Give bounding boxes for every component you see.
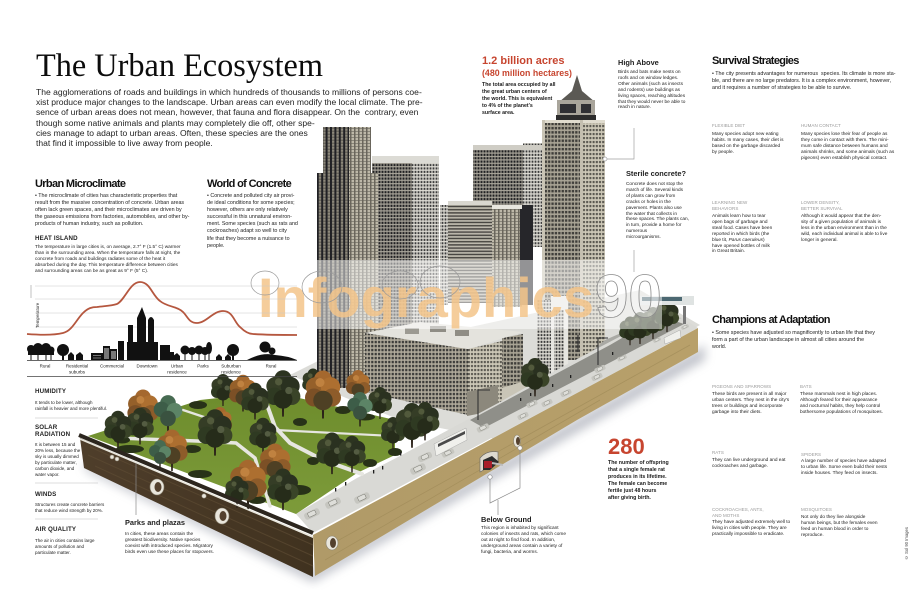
chart x labels: Downtown <box>136 364 158 368</box>
text: winds <box>35 502 104 513</box>
text: spiders: A large number of species have adapted <box>801 459 886 464</box>
heading: high above: High Above <box>618 58 659 67</box>
text: cockroaches, ants and moths: They have adjusted extremely well to <box>712 520 790 525</box>
line: high above leader <box>603 128 634 272</box>
heading: air quality: AIR QUALITY <box>35 526 76 533</box>
text: 280 offspring: The number of offspring <box>608 460 669 466</box>
text: cockroaches, ants and moths: practically impossible to eradicate. <box>712 532 784 537</box>
text: world of concrete: ment. Some species (such as rats and <box>207 221 298 227</box>
text: mosquitoes: feed on human blood in order to <box>801 527 868 532</box>
dark wall of block <box>80 438 313 577</box>
text: below ground: underground areas contain a variety of <box>481 544 562 549</box>
park trees <box>104 300 679 510</box>
label: lower density: LOWER DENSITY, <box>801 200 840 205</box>
temperature curve <box>27 282 297 335</box>
chart x labels: residence <box>167 370 187 374</box>
text: pigeons and sparrows: These birds are present in all major <box>712 392 786 397</box>
building: rear right block <box>473 143 543 247</box>
text: lower density: sity of a given population of animals is <box>801 220 881 225</box>
text: world of concrete: however, others are only relatively <box>207 207 288 213</box>
building: main tower with crown <box>542 75 605 360</box>
chart x labels <box>40 364 276 374</box>
text: lower density: Although it would appear that the den- <box>801 214 881 219</box>
text: human contact: mum safe distance between humans and <box>801 144 888 149</box>
text: high above: Other animals (such as insects <box>618 82 683 87</box>
label: pigeons and sparrows: PIGEONS AND SPARROWS <box>712 384 771 389</box>
intro text: that find it impossible to live away from people. <box>36 138 213 148</box>
text: below ground: This region is inhabited by significant <box>481 526 559 531</box>
label: cockroaches, ants and moths: COCKROACHES, ANTS, <box>712 507 764 512</box>
text: bats: Although feared for their appearance <box>800 398 877 403</box>
text: 280 offspring: The female can become <box>608 481 667 487</box>
cars and buses on the road <box>303 324 689 521</box>
title: The Urban Ecosystem <box>36 47 323 83</box>
text: human contact: Many species lose their fear of people as <box>801 132 887 137</box>
pedestrians <box>335 352 613 492</box>
label: cockroaches, ants and moths <box>712 507 764 518</box>
text: sterile concrete: microorganisms. <box>626 235 661 240</box>
text: bats: These mammals nest in high places. <box>800 392 877 397</box>
text: urban microclimate <box>35 193 190 227</box>
text: urban microclimate: products of human industry, such as pollution. <box>35 221 143 227</box>
text: parks and plazas: coexist with introduced species. Migratory <box>125 544 213 549</box>
text: survival strategies: • The city presents advantages for numerous species. Its climate is more sta- <box>712 71 896 77</box>
text: bats: bothersome populations of mosquitoes. <box>800 410 883 415</box>
text: heat island: absorbed during the day. This temperature difference between cities <box>35 263 178 268</box>
text: champions at adaptation: form a part of the urban landscape in almost all cities around the <box>712 337 864 343</box>
text: solar radiation: water vapor. <box>35 472 60 477</box>
text: high above: living spaces, reaching altitudes <box>618 94 685 99</box>
tan wall of block <box>313 328 698 576</box>
text: world of concrete: life that they become a nuisance to <box>207 236 290 242</box>
text: below ground: out at night to find food. In addition, <box>481 538 555 543</box>
text: lower density: wild, each individual animal is able to live <box>801 232 887 237</box>
text: sterile concrete: the water that collects in <box>626 212 677 217</box>
text: flexible diet: habits. In many cases, their diet is <box>712 138 784 143</box>
text: sterile concrete: numerous <box>626 229 647 234</box>
chart x labels: Commercial <box>100 364 124 368</box>
heading: heat island: HEAT ISLAND <box>35 235 78 242</box>
text: urban area stat <box>482 82 556 116</box>
chart x labels: residence <box>221 370 241 374</box>
text: champions at adaptation <box>712 330 875 350</box>
text: cockroaches, ants and moths: living in cities with people. They are <box>712 526 787 531</box>
text: solar radiation: sky is usually dimmed <box>35 454 79 459</box>
heading: solar radiation: SOLAR <box>35 424 57 431</box>
street lights <box>478 335 608 420</box>
intro text: The agglomerations of roads and buildings in which hundreds of thousands to millions of persons coe- <box>36 87 422 97</box>
top surface of the block: pavement <box>296 318 698 533</box>
text: high above: Birds and bats make nests on <box>618 70 681 75</box>
text: learning new behaviors: steal food. Cases have been <box>712 226 772 231</box>
text: rats <box>712 458 786 469</box>
text: air quality: particulate matter. <box>35 550 71 555</box>
text: pigeons and sparrows <box>712 392 789 415</box>
text: flexible diet: by people. <box>712 150 734 155</box>
chart x labels: Rural <box>266 364 276 368</box>
text: learning new behaviors: in Great Britain. <box>712 249 745 254</box>
text: pigeons and sparrows: garbage into their diets. <box>712 410 762 415</box>
text: humidity <box>35 400 107 411</box>
skyline silhouette <box>27 307 297 360</box>
text: rats: cockroaches and garbage. <box>712 464 768 469</box>
text: survival strategies: ble, and there are no large predators. It is a complex environment, however, <box>712 78 891 84</box>
text: world of concrete: • Concrete and polluted city air provi- <box>207 193 294 199</box>
heading: parks and plazas: Parks and plazas <box>125 518 185 527</box>
heading: humidity: HUMIDITY <box>35 388 66 395</box>
text: lower density: longer in general. <box>801 238 838 243</box>
text: high above: roofs and on window ledges. <box>618 76 678 81</box>
park lawn <box>88 392 395 514</box>
text: parks and plazas: In cities, these areas contain the <box>125 532 193 537</box>
text: mosquitoes: reproduce. <box>801 533 824 538</box>
text: sterile concrete: pavement. Plants also use <box>626 206 682 211</box>
text: parks and plazas <box>125 532 214 555</box>
text: world of concrete <box>207 193 298 249</box>
text: air quality: The air in cities contains large <box>35 538 95 543</box>
text: solar radiation: carbon dioxide, and <box>35 466 74 471</box>
text: winds: that reduce wind strength by 20%. <box>35 508 103 513</box>
text: urban microclimate: the gaseous emissions from factories, automobiles, and other by- <box>35 214 189 220</box>
text: below ground: colonies of insects and rats, which come <box>481 532 566 537</box>
text: urban area stat: the world. This is equivalent <box>482 96 552 102</box>
text: heat island: than in the surrounding area. When the temperature falls at night, the <box>35 251 180 256</box>
heading: solar radiation <box>35 424 70 438</box>
tunnel with red pipe <box>480 452 503 472</box>
text: 280 offspring <box>608 460 669 501</box>
text: learning new behaviors <box>712 214 772 254</box>
text: solar radiation: by particulate matter, <box>35 460 77 465</box>
text: air quality: amounts of pollution and <box>35 544 84 549</box>
text: humidity: It tends to be lower, although <box>35 400 93 405</box>
text: cockroaches, ants and moths <box>712 520 790 537</box>
stat: 280: 280 <box>608 434 645 459</box>
text: sterile concrete <box>626 182 689 240</box>
heading: survival strategies: Survival Strategies <box>712 55 799 67</box>
chart x labels: Urban <box>171 364 184 368</box>
curb and pipes on the block edge <box>79 435 520 550</box>
chart x labels: Residential <box>66 364 88 368</box>
heading: champions at adaptation: Champions at Adaptation <box>712 314 830 326</box>
text: mosquitoes: Not only do they live alongside <box>801 515 865 520</box>
label: bats: BATS <box>800 384 812 389</box>
intro text: cies manage to adapt to urban areas. Often, these species are the ones <box>36 128 308 138</box>
building: white slab by the road <box>537 296 568 378</box>
text: flexible diet: based on the garbage discarded <box>712 144 780 149</box>
text: spiders <box>801 458 887 476</box>
watermark band <box>300 260 662 329</box>
line: parks leader <box>135 463 137 515</box>
text: world of concrete: cockroaches) adapt so well to city <box>207 228 287 234</box>
heading: below ground: Below Ground <box>481 515 532 524</box>
stat: 1.2 billion acres: 1.2 billion acres <box>482 55 565 67</box>
text: urban microclimate: often lack green spaces, and their microclimates are driven by <box>35 207 182 213</box>
text: urban area stat: to 4% of the planet's <box>482 103 533 109</box>
text: bats <box>800 392 883 415</box>
text: world of concrete: people. <box>207 243 225 249</box>
text: mosquitoes <box>801 514 878 538</box>
park paths <box>118 402 393 506</box>
monorail on pillars <box>640 296 694 324</box>
text: high above: that they would never be able to <box>618 100 685 105</box>
watermark text: Infographics <box>258 266 594 329</box>
heat island chart <box>27 282 297 376</box>
text: spiders: to urban life. Some even build their nests <box>801 465 887 470</box>
text: urban microclimate: result from the massive concentration of concrete. Urban areas <box>35 200 184 206</box>
ground shadow <box>85 345 705 582</box>
text: sterile concrete: Concrete does not stop the <box>626 182 683 187</box>
label: learning new behaviors: BEHAVIORS <box>712 206 738 211</box>
heading: sterile concrete: Sterile concrete? <box>626 169 686 178</box>
text: survival strategies: and it requires a number of strategies to be able to survive. <box>712 85 851 91</box>
park shrubs <box>114 401 402 504</box>
text: flexible diet: Many species adopt new eating <box>712 132 779 137</box>
text: flexible diet <box>712 132 784 155</box>
intro text <box>36 87 423 148</box>
label: rats: RATS <box>712 450 724 455</box>
text: air quality <box>35 538 95 555</box>
text: lower density: less in the urban environment than in the <box>801 226 887 231</box>
text: humidity: rainfall is heavier and more plentiful. <box>35 406 107 411</box>
intro text: xist produce major changes to the landscape. Urban areas can even modify the local climate. The pre- <box>36 97 423 107</box>
street surface behind the buildings <box>290 290 700 440</box>
heading: urban microclimate: Urban Microclimate <box>35 178 125 190</box>
plaza in front of the tower <box>568 316 682 372</box>
text: human contact: pigeons) even establish physical contact. <box>801 156 887 161</box>
text: spiders: inside houses. They feed on insects. <box>801 471 878 476</box>
road <box>470 316 684 428</box>
heading: solar radiation: RADIATION <box>35 431 70 438</box>
text: human contact: animals shrinks, and some animals (such as <box>801 150 894 155</box>
heading: winds: WINDS <box>35 491 56 498</box>
text: sterile concrete: these spaces. The plants can, <box>626 217 689 222</box>
building: middle block <box>440 201 533 307</box>
text: lower density <box>801 214 888 243</box>
line: below ground leader <box>488 446 522 515</box>
text: learning new behaviors: have opened bottles of milk <box>712 244 770 249</box>
text: high above: and rodents) use buildings as <box>618 88 680 93</box>
text: parks and plazas: greatest biodiversity. Native species <box>125 538 200 543</box>
text: below ground: fungi, bacteria, and worms. <box>481 550 538 555</box>
chart x labels: suburbs <box>69 370 86 374</box>
text: 280 offspring: that a single female rat <box>608 467 665 473</box>
text: human contact <box>801 132 894 161</box>
text: sterile concrete: of plants can grow from <box>626 194 675 199</box>
text: sterile concrete: in turn, provide a home for <box>626 223 681 228</box>
text: urban area stat: surface area. <box>482 110 514 116</box>
label: flexible diet: FLEXIBLE DIET <box>712 123 745 128</box>
text: world of concrete: successful in this unnatural environ- <box>207 214 292 220</box>
text: solar radiation: It is between 15 and <box>35 442 75 447</box>
chart x labels: Suburban <box>221 364 241 368</box>
text: heat island <box>35 244 181 274</box>
label: lower density <box>801 200 843 211</box>
text: world of concrete: de ideal conditions for some species; <box>207 200 295 206</box>
chart x labels: Rural <box>40 364 50 368</box>
text: heat island: The temperature in large cities is, on average, 2.7° F (1.5° C) warmer <box>35 245 181 250</box>
text: pigeons and sparrows: trees or buildings and incorporate <box>712 404 783 409</box>
intro text: sence of urban areas does not mean, however, that fauna and flora disappear. On the contrary, even <box>36 107 418 117</box>
text: urban area stat: the great urban centers of <box>482 89 547 95</box>
text: solar radiation: 20% less, because the <box>35 448 80 453</box>
building: tall stepped tower <box>317 127 378 388</box>
text: sterile concrete: march of life. Several kinds <box>626 188 683 193</box>
text: champions at adaptation: world. <box>712 344 726 350</box>
text: winds: Structures create concrete barriers <box>35 502 104 507</box>
text: learning new behaviors: Animals learn how to tear <box>712 214 766 219</box>
label: learning new behaviors: LEARNING NEW <box>712 200 747 205</box>
text: parks and plazas: birds even use these places for stopovers. <box>125 550 214 555</box>
text: heat island: concrete from roads and buildings radiates some of the heat it <box>35 257 165 262</box>
heat island chart: Temperature <box>35 302 40 328</box>
text: survival strategies <box>712 71 896 91</box>
label: spiders: SPIDERS <box>801 452 821 457</box>
text: learning new behaviors: blue tit, Parus caeruleus) <box>712 238 765 243</box>
text: heat island: and surrounding areas can be as great as 9° F (5° C). <box>35 269 148 274</box>
chart x labels: Parks <box>197 364 209 368</box>
text: sterile concrete: cracks or holes in the <box>626 200 671 205</box>
text: champions at adaptation: • Some species have adjusted so magnificently to urban life that they <box>712 330 875 336</box>
text: human contact: they come in contact with them. The mini- <box>801 138 889 143</box>
text: high above <box>618 70 686 110</box>
text: 280 offspring: fertile just 48 hours <box>608 488 656 494</box>
building: left center tower <box>372 156 439 352</box>
text: 280 offspring: produces in its lifetime. <box>608 474 667 480</box>
text: rats: They can live underground and eat <box>712 458 785 463</box>
text: bats: and nocturnal habits, they help control <box>800 404 880 409</box>
building: low wide office block <box>365 322 528 416</box>
label: cockroaches, ants and moths: AND MOTHS <box>712 513 739 518</box>
text: pigeons and sparrows: urban centers. They nest in the city's <box>712 398 789 403</box>
watermark text: 90 <box>595 263 662 330</box>
label: learning new behaviors <box>712 200 748 211</box>
text: high above: reach in nature. <box>618 105 651 110</box>
text: learning new behaviors: open bags of garbage and <box>712 220 767 225</box>
credit: © Sol 90 Images <box>904 527 909 560</box>
text: urban area stat: The total area occupied by all <box>482 82 556 88</box>
intro text: though some native animals and plants may completely die off, other spe- <box>36 118 315 128</box>
label: mosquitoes: MOSQUITOES <box>801 507 832 512</box>
text: solar radiation <box>35 442 80 477</box>
stat: 480 million hectares: (480 million hectares) <box>482 68 572 78</box>
text: 280 offspring: after giving birth. <box>608 495 651 501</box>
text: urban microclimate: • The microclimate of cities has characteristic properties that <box>35 193 177 199</box>
label: human contact: HUMAN CONTACT <box>801 123 841 128</box>
text: mosquitoes: human beings, but the females even <box>801 521 878 526</box>
label: lower density: BETTER SURVIVAL <box>801 206 843 211</box>
heading: world of concrete: World of Concrete <box>207 178 291 190</box>
text: below ground <box>481 526 566 555</box>
text: learning new behaviors: reported in which birds (the <box>712 232 769 237</box>
